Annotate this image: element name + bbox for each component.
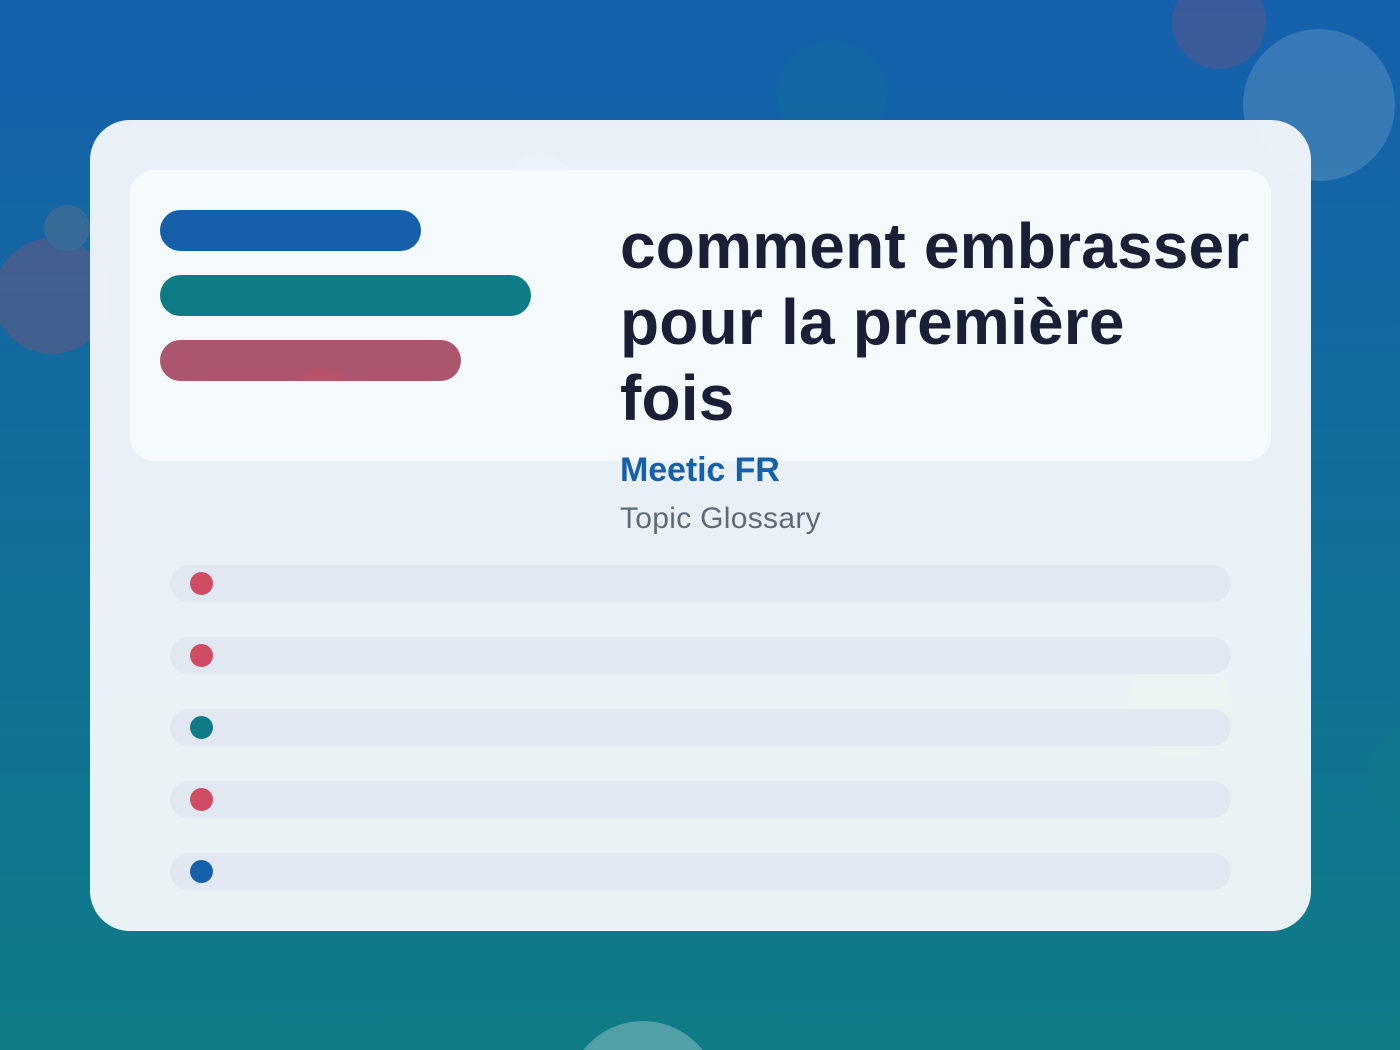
list row 4 <box>170 781 1231 818</box>
rose decorative bar <box>160 340 461 381</box>
list row 3 <box>170 709 1231 746</box>
main card <box>90 120 1311 931</box>
subtitle: category: Topic Glossary <box>620 502 821 535</box>
title: fois <box>620 362 735 434</box>
panel: header <box>130 170 1271 461</box>
title <box>620 210 1249 434</box>
list row 5 <box>170 853 1231 890</box>
title: pour la première <box>620 286 1125 358</box>
subtitle: brand name: Meetic FR <box>620 451 780 489</box>
list row 1 <box>170 565 1231 602</box>
list row 2 <box>170 637 1231 674</box>
teal decorative bar <box>160 275 531 316</box>
faint circles seen through card <box>90 120 1311 757</box>
blue decorative bar <box>160 210 421 251</box>
title: comment embrasser <box>620 210 1249 282</box>
